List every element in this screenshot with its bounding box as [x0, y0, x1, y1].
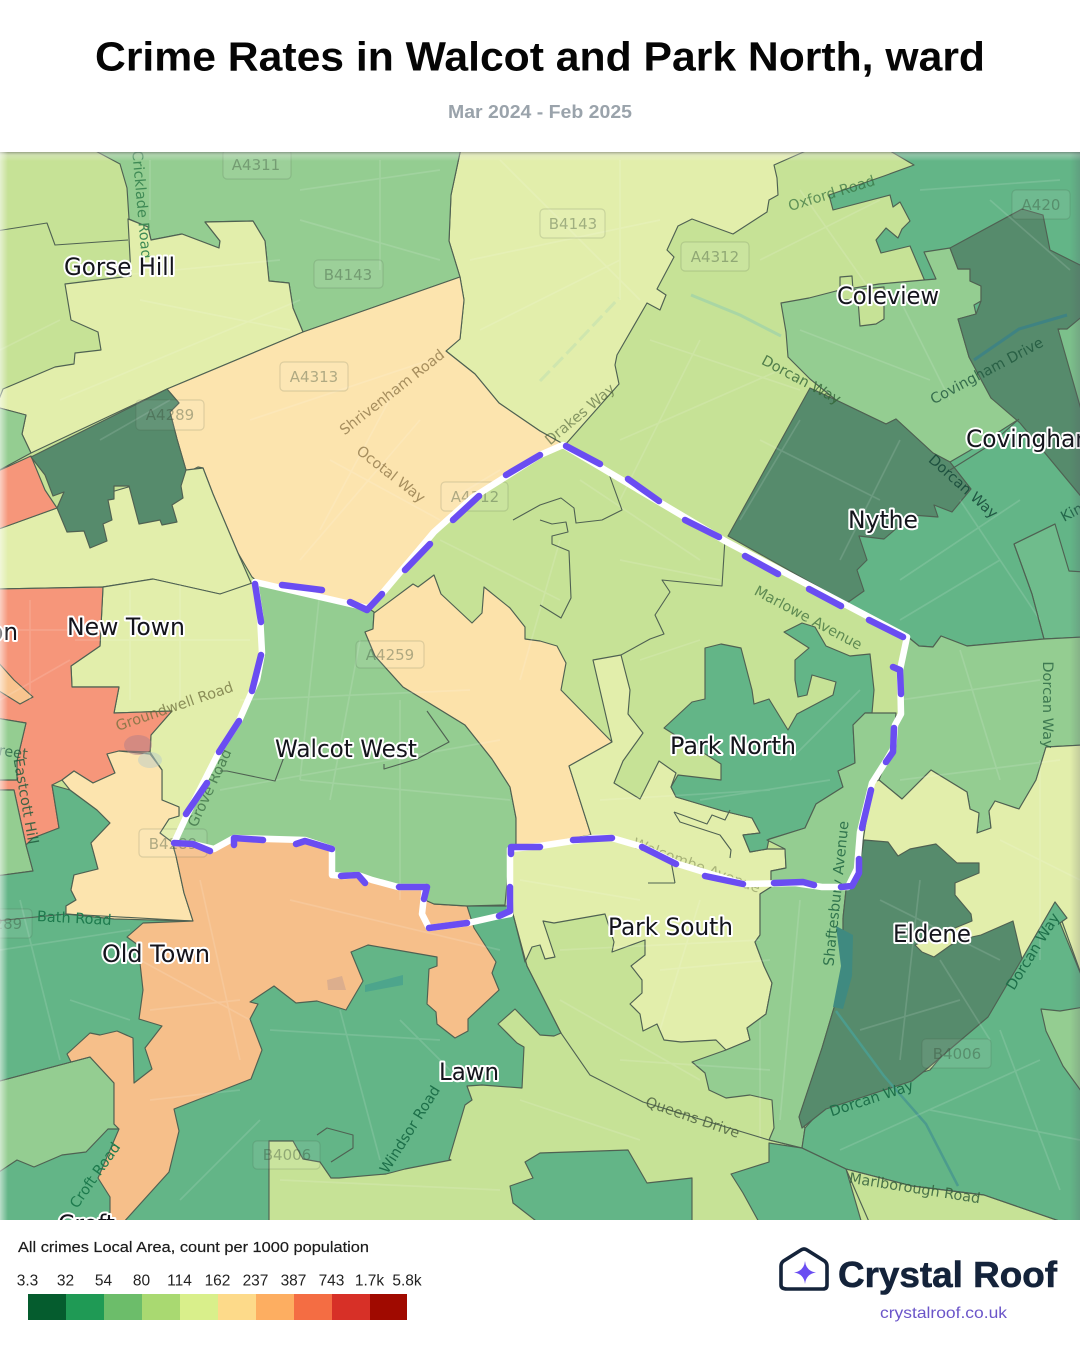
- road labels: Dorcan Way: [828, 1078, 916, 1120]
- legend: [17, 1239, 422, 1320]
- road labels: Ocotal Way: [353, 443, 428, 507]
- soft map edge fade: [0, 152, 1080, 1220]
- road shields: A4311: [232, 156, 280, 174]
- legend title: All crimes Local Area, count per 1000 population: [18, 1239, 369, 1256]
- road labels: Queens Drive: [643, 1095, 742, 1142]
- website url: crystalroof.co.uk: [880, 1305, 1008, 1322]
- place labels: Park North: [670, 732, 796, 760]
- road shields: A4289: [146, 406, 194, 424]
- road labels: Oxford Road: [787, 173, 877, 215]
- road shields: B4006: [263, 1146, 311, 1164]
- ward boundary: Walcot and Park North: [174, 445, 907, 928]
- road labels: Dorcan Way: [1039, 661, 1055, 749]
- road labels: Welcombe Avenue: [631, 836, 762, 897]
- south-east teal area: [802, 902, 1080, 1224]
- place labels: Old Town: [102, 940, 210, 968]
- Dorcan Way east mid green area: [879, 636, 1080, 833]
- road labels: Grove Road: [185, 747, 235, 830]
- legend scale values: 162: [205, 1272, 230, 1290]
- logo: Crystal Roof: [781, 1249, 1058, 1322]
- subtitle: date range: Mar 2024 - Feb 2025: [448, 101, 632, 122]
- place labels: Coleview: [837, 282, 939, 310]
- bottom centre teal areas: [510, 1150, 692, 1224]
- map regions: coloured crime-rate areas: [0, 148, 1080, 1224]
- place labels: Nythe: [848, 506, 918, 534]
- yellow area east of Eldene: [862, 744, 1080, 970]
- road shields: B4289: [149, 835, 197, 853]
- road labels: Marlborough Road: [848, 1171, 981, 1207]
- road labels: Shaftesbury Avenue: [821, 820, 853, 967]
- title: Crime Rates in Walcot and Park North, ward: [95, 34, 985, 80]
- Nythe dark area: [728, 388, 971, 603]
- legend scale values: 387: [281, 1272, 306, 1290]
- legend scale values: 80: [133, 1272, 150, 1290]
- road labels: Dorcan Way: [1004, 910, 1064, 993]
- road labels: Dorcan Way: [925, 452, 1001, 522]
- legend scale values: 5.8k: [392, 1272, 422, 1290]
- road labels: Croft Road: [67, 1140, 124, 1211]
- legend colour bar: [28, 1294, 407, 1320]
- Coleview mid green area: [781, 248, 1019, 462]
- road shields: [0, 150, 1070, 1169]
- centre peach area: [365, 575, 612, 848]
- legend scale values: 32: [57, 1272, 74, 1290]
- road labels: Cricklade Road: [128, 150, 154, 259]
- Shaftesbury Avenue mid green area: [692, 713, 896, 1148]
- legend scale values: 743: [319, 1272, 344, 1290]
- road labels: Dorcan Way: [759, 353, 844, 408]
- place labels: Croft: [58, 1210, 115, 1238]
- road shields: A4313: [290, 368, 338, 386]
- place labels: New Town: [67, 613, 185, 641]
- road shields: A4312: [451, 488, 499, 506]
- road labels: Shrivenham Road: [337, 347, 448, 439]
- road shields: A420: [1022, 196, 1060, 214]
- road shields: A4259: [366, 646, 414, 664]
- place labels: [0, 253, 1080, 1238]
- legend scale values: 1.7k: [355, 1272, 384, 1290]
- road labels: Groundwell Road: [114, 680, 236, 735]
- road labels: Marlowe Avenue: [751, 583, 864, 654]
- road labels: Eastcott Hill: [9, 757, 40, 846]
- legend scale values: 54: [95, 1272, 112, 1290]
- legend scale values: 237: [243, 1272, 268, 1290]
- water features: [124, 295, 1067, 1186]
- place labels: Gorse Hill: [64, 253, 175, 281]
- road labels: Windsor Road: [377, 1083, 444, 1176]
- legend scale values: [17, 1272, 422, 1290]
- road shields: A4312: [691, 248, 739, 266]
- road labels: Bath Road: [36, 909, 112, 929]
- road labels: Drakes Way: [542, 381, 619, 449]
- interior area boundary lines: [0, 223, 1068, 1224]
- yellow Park area: [510, 655, 786, 1050]
- place labels: Park South: [608, 913, 733, 941]
- Walcot West area: [174, 582, 516, 906]
- place labels: Eldene: [893, 920, 971, 948]
- road labels: [0, 150, 1080, 1211]
- Covingham dark area: [950, 209, 1080, 500]
- road shields: B4143: [549, 215, 597, 233]
- street network: [0, 160, 1080, 1200]
- road shields: B4006: [933, 1045, 981, 1063]
- road labels: Covingham Drive: [928, 335, 1046, 408]
- teal area west and south of Old Town, Lawn: [0, 785, 561, 1224]
- Eldene dark area: [799, 840, 1022, 1128]
- legend scale values: 3.3: [17, 1272, 38, 1290]
- road shields: B4143: [324, 266, 372, 284]
- Park North teal area: [664, 623, 874, 852]
- logo wordmark: Crystal Roof: [838, 1254, 1058, 1295]
- place labels: Lawn: [439, 1058, 499, 1086]
- icon: house with star: [781, 1249, 827, 1289]
- place labels: Walcot West: [275, 735, 417, 763]
- Nythe and Covingham east teal: [810, 148, 1080, 647]
- legend scale values: 114: [167, 1272, 192, 1290]
